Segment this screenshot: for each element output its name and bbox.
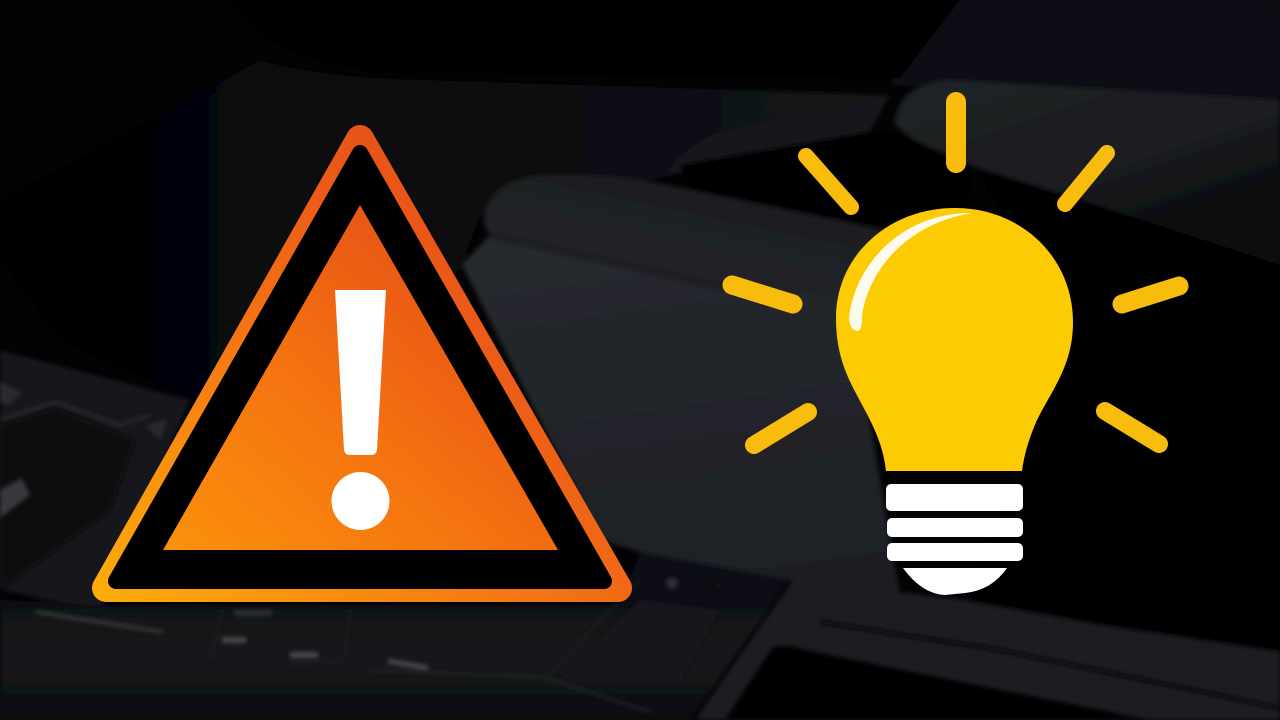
triangle inner fill: [163, 205, 558, 550]
exclamation bar: [335, 290, 386, 455]
seam on center pad: [490, 236, 724, 288]
bulb highlight: [849, 213, 972, 331]
triangle black band: [116, 153, 604, 581]
triangle outer border: [106, 139, 618, 588]
icon: light bulb: [732, 102, 1179, 595]
exclamation dot: [332, 472, 390, 530]
bulb base stripes: [886, 484, 1023, 595]
center console vent: [725, 646, 1150, 720]
console mesh panel: [0, 408, 135, 590]
console highlights and buttons: [0, 382, 1280, 720]
bulb glass: [836, 208, 1073, 471]
icon: warning triangle: [106, 139, 618, 588]
bulb rays: [732, 102, 1179, 445]
